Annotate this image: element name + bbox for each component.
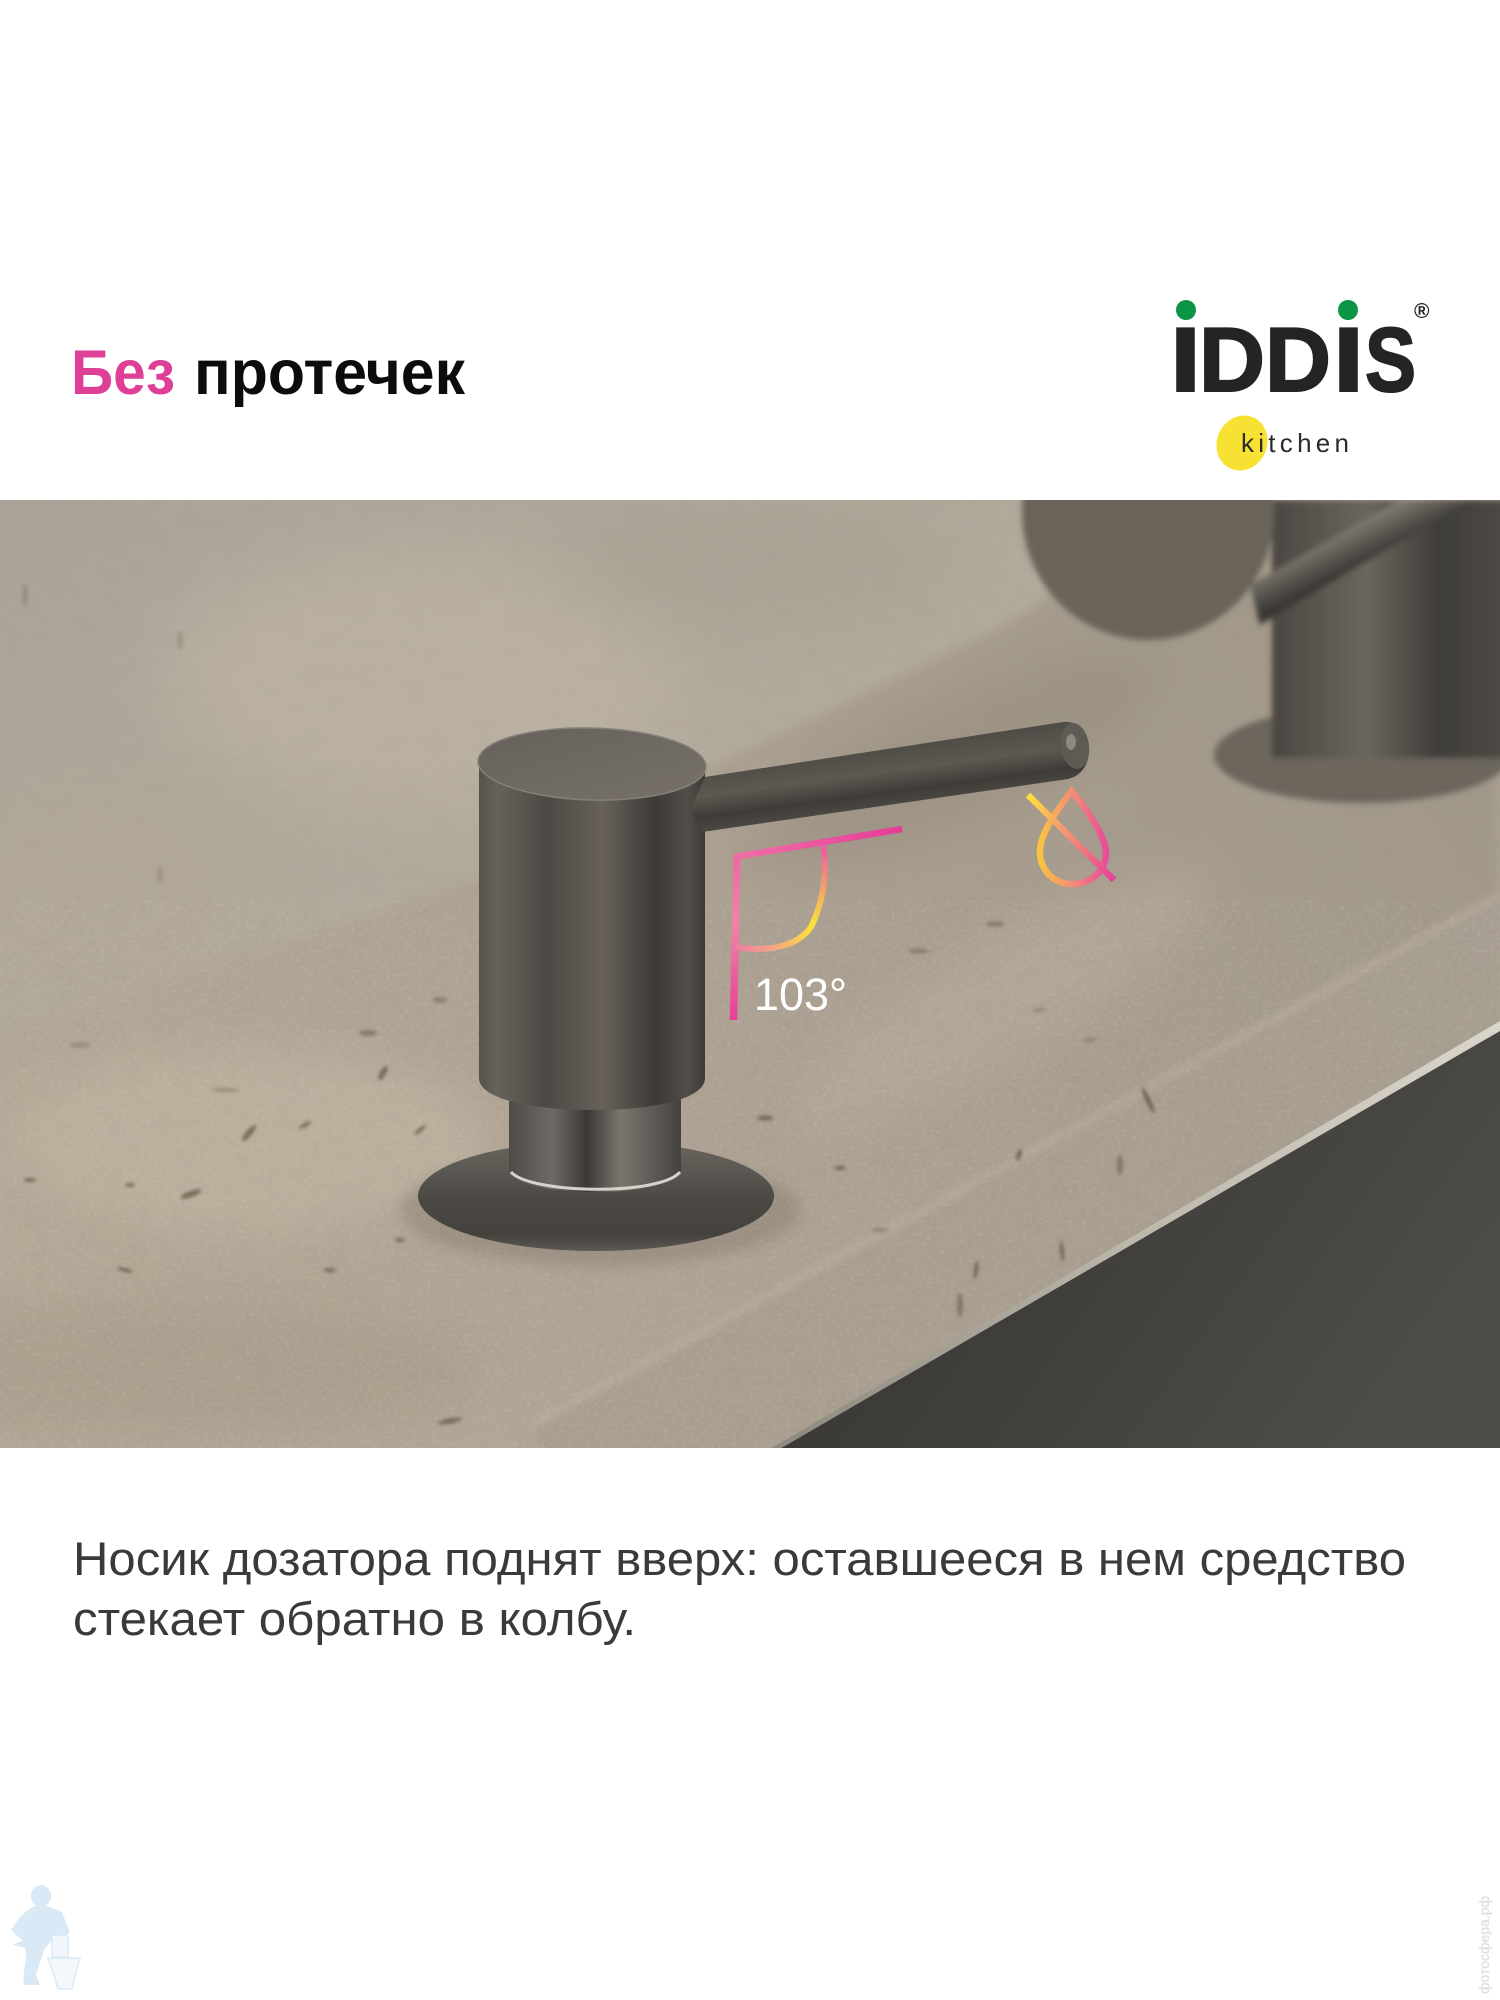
- logo: wordmark: I: [1170, 310, 1201, 411]
- angle: arc lower: [735, 927, 811, 949]
- dispenser cap: [477, 725, 707, 803]
- photo: soap dispenser on stone counter: [0, 500, 1500, 1448]
- logo: kitchen: kitchen: [1241, 428, 1349, 458]
- dispenser chrome ring: [511, 1172, 680, 1189]
- logo: registered mark: ®: [1414, 300, 1430, 323]
- faucet body: [1272, 500, 1500, 758]
- watermark: plumber with toilet: [11, 1885, 80, 1989]
- spout tip: [1058, 721, 1092, 771]
- faucet handle stem: [1250, 500, 1470, 625]
- photo: stone pits: [22, 583, 1156, 1426]
- dispenser body: [479, 766, 705, 1110]
- logo: wordmark: I: [1333, 310, 1364, 411]
- photo: sink rim highlight: [770, 1021, 1500, 1450]
- faucet base plate: [1214, 707, 1500, 803]
- title: [71, 338, 465, 408]
- angle: vertical ray: [734, 857, 737, 1020]
- logo: wordmark: D: [1199, 310, 1265, 411]
- dispenser: [418, 721, 1092, 1251]
- logo: wordmark: [1170, 310, 1416, 411]
- annotation: spout angle: [734, 829, 902, 1020]
- logo: iddis kitchen: [1170, 300, 1430, 479]
- toilet bowl: [48, 1958, 80, 1989]
- drop slash: [1028, 795, 1114, 880]
- plumber wrench arm: [12, 1935, 42, 1948]
- dispenser spout: [692, 722, 1089, 832]
- body text: [73, 1532, 1406, 1645]
- drop outline: [1040, 791, 1106, 884]
- faucet handle disc: [1018, 500, 1276, 643]
- photo: stone wall: [0, 500, 1500, 1448]
- annotation: no-drip drop icon: [1028, 791, 1114, 884]
- logo: wordmark: D: [1265, 310, 1331, 411]
- photo: stone texture: [0, 500, 1500, 1448]
- angle: arc upper: [811, 846, 825, 927]
- toilet tank: [52, 1935, 68, 1957]
- body text line 2: стекает обратно в колбу.: [73, 1592, 636, 1645]
- photo: counter top: [384, 549, 1499, 1098]
- photo: sink basin: [770, 1025, 1500, 1450]
- dispenser base plate: [418, 1141, 774, 1251]
- title: black word: протечек: [194, 338, 465, 408]
- logo: yellow blob: [1208, 407, 1276, 479]
- plumber torso and legs: [11, 1906, 70, 1985]
- annotation: angle value: 103°: [754, 969, 847, 1020]
- title: pink word: Без: [71, 338, 175, 408]
- logo: green dots: [1176, 300, 1358, 320]
- angle: top ray: [734, 829, 902, 857]
- logo: wordmark: S: [1365, 310, 1416, 411]
- photo: blurred faucet in background: [1018, 500, 1500, 806]
- dispenser neck: [509, 1090, 681, 1192]
- plumber head: [31, 1885, 51, 1907]
- dispenser shadow: [400, 1178, 800, 1268]
- photo: counter edge highlight: [1230, 896, 1495, 1042]
- body text line 1: Носик дозатора поднят вверх: оставшееся в нем средство: [73, 1532, 1406, 1585]
- watermark: vertical site text: фотосфера.рф: [1476, 1896, 1492, 1994]
- photo: counter front face: [536, 894, 1500, 1450]
